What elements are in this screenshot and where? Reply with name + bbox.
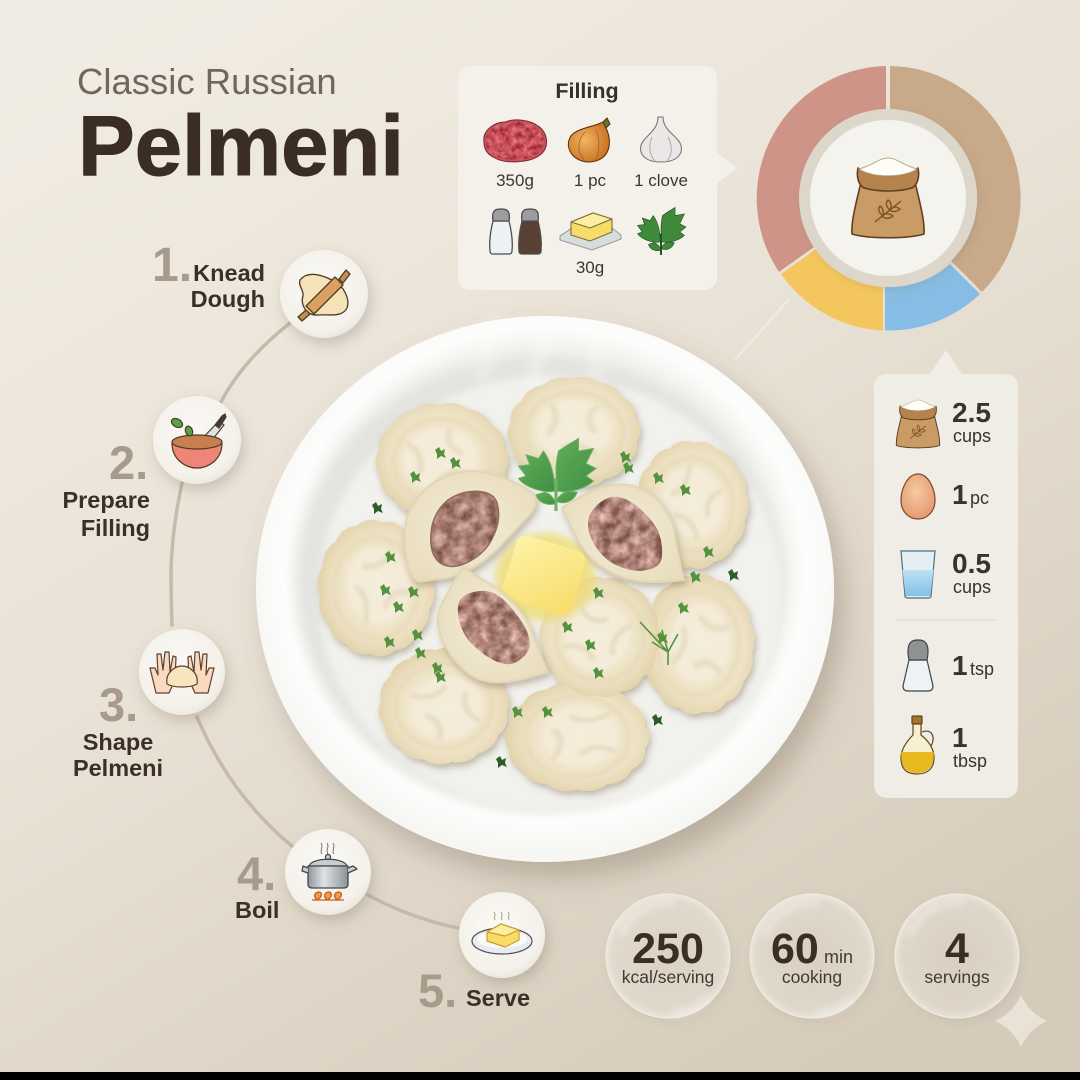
- step circle: [139, 629, 225, 715]
- value: 60: [771, 925, 819, 973]
- label: kcal/serving: [622, 967, 714, 987]
- icon: oil bottle: [901, 716, 934, 774]
- icon: garlic: [641, 117, 681, 162]
- subtitle: Classic Russian: Classic Russian: [77, 61, 337, 102]
- step number: 5.: [418, 964, 457, 1017]
- icon: bowl with knife and herbs: [170, 414, 226, 468]
- parsley garnish: [518, 438, 596, 511]
- amount: 2.5 cups: 2.5: [952, 397, 991, 428]
- icon: butter on tray: [560, 213, 621, 250]
- amount: 1 pc: 1: [952, 479, 968, 510]
- icon: flour sack: [896, 400, 940, 448]
- icon: onion: [568, 118, 610, 162]
- icon: ground meat: [484, 120, 547, 162]
- panel background with pointer: [458, 66, 737, 290]
- icon: egg: [901, 474, 935, 519]
- stat: cooking time: [750, 894, 874, 1018]
- segment: flour: [890, 66, 1021, 292]
- amount: 1 pc: [952, 479, 989, 510]
- value: 4: [945, 925, 969, 973]
- step 4: boil: [235, 829, 371, 923]
- plate: [256, 316, 834, 862]
- icon: glass of water: [901, 551, 935, 598]
- butter pat: [500, 533, 588, 617]
- step label: Boil: [235, 897, 279, 923]
- icon: rolling pin and dough: [298, 270, 350, 321]
- step label: Shape: [83, 729, 153, 755]
- label: cooking: [782, 967, 842, 987]
- step 1: knead dough: [152, 239, 368, 338]
- amount: 1 tbsp: tbsp: [953, 751, 987, 771]
- amount: 2.5 cups: cups: [953, 426, 991, 446]
- donut chart: ingredient proportions: [757, 66, 1021, 331]
- hub disc: [810, 120, 966, 276]
- panel: dough ingredients: [874, 350, 1018, 798]
- divider: [896, 619, 997, 621]
- step label: Knead: [193, 260, 265, 286]
- amount: 1 tsp: [952, 650, 994, 681]
- amount: 1 tsp: tsp: [970, 659, 994, 679]
- segment: water: [885, 264, 980, 331]
- amount: 1 pc: pc: [970, 488, 989, 508]
- panel background with pointer: [874, 350, 1018, 798]
- amount: 0.5 cups: [952, 548, 991, 597]
- panel: filling: [458, 66, 737, 290]
- cut dumpling left: [404, 471, 536, 582]
- value: 250: [632, 925, 704, 973]
- plate of pelmeni: [256, 316, 834, 862]
- stat: servings: [895, 894, 1019, 1018]
- icon: butter on a plate: [472, 912, 532, 954]
- cut dumpling right: [562, 484, 684, 582]
- icon: boiling pot: [302, 843, 357, 900]
- step number: 3.: [99, 678, 138, 731]
- text: 1 pc: 1 pc: [574, 171, 607, 190]
- step 3: shape pelmeni: [73, 629, 225, 781]
- amount: 1 tsp: 1: [952, 650, 968, 681]
- text: 1 clove: 1 clove: [634, 171, 688, 190]
- step label: Filling: [81, 515, 150, 541]
- step number: 1.: [152, 239, 192, 292]
- herb flecks: [372, 447, 739, 768]
- step circle: [285, 829, 371, 915]
- amount: 1 tbsp: [952, 722, 987, 771]
- cut dumpling bottom: [438, 567, 548, 683]
- hub ring: [799, 109, 977, 287]
- glass bubble: [750, 894, 874, 1018]
- label: servings: [924, 967, 990, 987]
- step circle: [153, 396, 241, 484]
- icon: flour sack: [852, 158, 924, 238]
- text: 30g: 30g: [576, 258, 604, 277]
- step number: 4.: [237, 847, 276, 900]
- heading: Filling: Filling: [555, 79, 619, 103]
- step circle: [280, 250, 368, 338]
- icon: parsley: [638, 207, 686, 255]
- leader line: [735, 298, 790, 360]
- unit: min: [824, 947, 853, 967]
- step label: Dough: [191, 286, 265, 312]
- title: [77, 61, 404, 194]
- segment: meat: [757, 66, 886, 272]
- segment: egg: [781, 249, 883, 330]
- amount: 0.5 cups: cups: [953, 577, 991, 597]
- icon: salt shaker: [903, 640, 933, 691]
- heading: Pelmeni: Pelmeni: [78, 99, 404, 194]
- text: 350g: 350g: [496, 171, 534, 190]
- sparkle: [995, 995, 1047, 1047]
- icon: hands shaping dumpling: [150, 652, 214, 693]
- step circle: [459, 892, 545, 978]
- step number: 2.: [109, 436, 148, 489]
- glass bubble: [895, 894, 1019, 1018]
- whole dumplings: [301, 368, 771, 791]
- melted butter pool: [495, 533, 595, 621]
- step 5: serve: [418, 892, 545, 1017]
- amount: 0.5 cups: 0.5: [952, 548, 991, 579]
- bottom black bar: [0, 1072, 1080, 1080]
- step 2: prepare filling: [62, 396, 241, 541]
- step label: Serve: [466, 985, 530, 1011]
- dill sprig: [640, 622, 678, 665]
- glass bubble: [606, 894, 730, 1018]
- steam wisps: [480, 318, 600, 390]
- amount: 2.5 cups: [952, 397, 991, 446]
- step label: Prepare: [62, 487, 150, 513]
- icon: salt and pepper shakers: [490, 209, 541, 254]
- amount: 1 tbsp: 1: [952, 722, 968, 753]
- stat: calories: [606, 894, 730, 1018]
- timeline connector arc: [171, 323, 458, 928]
- step label: Pelmeni: [73, 755, 163, 781]
